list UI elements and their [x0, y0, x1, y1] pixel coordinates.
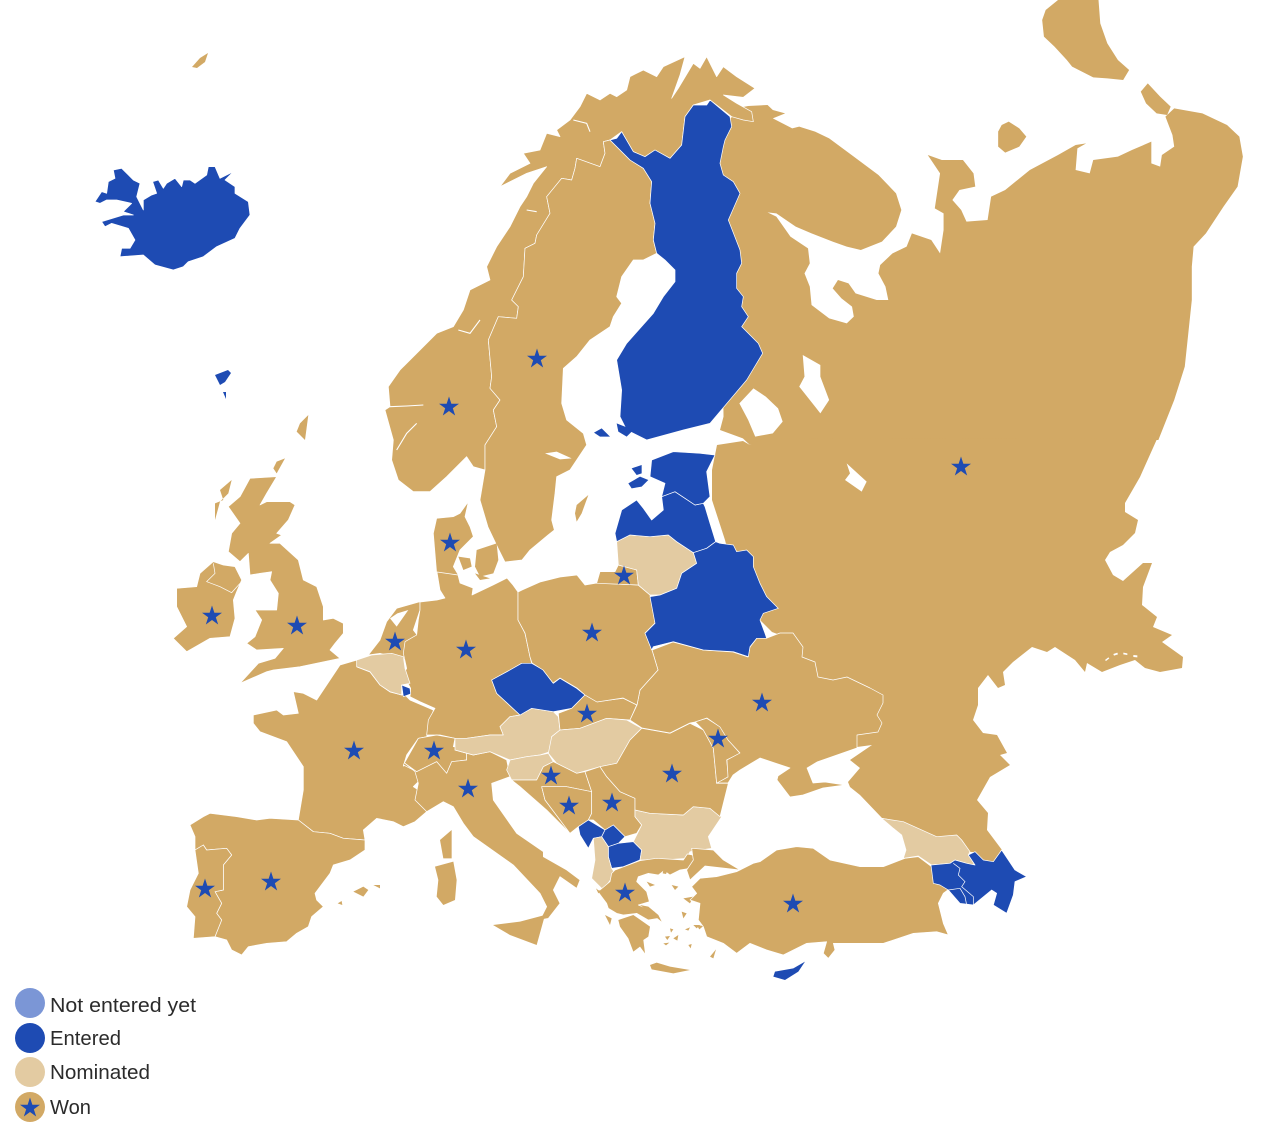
IJsselmeer — [390, 610, 408, 627]
Albania — [592, 837, 615, 890]
Balearic Islands — [338, 885, 380, 905]
Belarus — [645, 542, 778, 657]
Great Britain — [228, 477, 343, 683]
Hungary — [548, 718, 642, 773]
Kolguev island — [998, 122, 1026, 153]
star: Spain — [261, 872, 281, 890]
Romania — [600, 723, 728, 817]
France — [253, 660, 433, 840]
Luxembourg — [402, 685, 411, 697]
star: Switzerland — [424, 740, 444, 759]
white sea islands cut-outs and lakes — [739, 355, 1137, 661]
Russia — [712, 105, 1243, 862]
legend item: Entered — [15, 1023, 121, 1053]
Spain — [190, 813, 365, 955]
Estonia — [628, 452, 715, 505]
Germany — [403, 572, 532, 738]
star: Kaliningrad — [614, 566, 634, 584]
Ireland — [173, 562, 242, 652]
North Macedonia — [608, 842, 642, 868]
Greece — [596, 854, 716, 973]
star: Sweden — [527, 348, 547, 367]
legend item: Nominated — [15, 1057, 150, 1087]
Poland — [518, 575, 658, 705]
Bulgaria — [633, 807, 722, 860]
Sweden — [480, 140, 657, 562]
star: France — [344, 740, 364, 759]
Italy — [405, 750, 580, 920]
Novaya Zemlya — [1042, 0, 1129, 80]
Switzerland — [403, 735, 467, 773]
Norway — [385, 57, 755, 492]
star: Moldova — [708, 728, 728, 747]
Lake Vanern — [545, 452, 572, 459]
star: Germany — [456, 640, 476, 658]
Croatia — [512, 762, 592, 833]
star: Slovakia — [577, 704, 597, 722]
Iceland — [95, 167, 250, 270]
star: Denmark — [440, 532, 460, 551]
Belgium — [357, 653, 410, 695]
Turkey — [687, 847, 950, 958]
star: Greece — [615, 882, 635, 901]
Corsica — [440, 830, 452, 858]
Montenegro — [578, 820, 605, 848]
Netherlands — [368, 602, 420, 660]
Kaliningrad — [597, 565, 638, 585]
legend — [15, 988, 196, 1122]
Denmark — [433, 502, 498, 580]
Lithuania — [617, 535, 697, 595]
star: Romania — [662, 764, 682, 782]
Kosovo — [602, 825, 625, 847]
legend item: Not entered yet — [15, 988, 196, 1018]
Georgia — [882, 818, 975, 865]
Czech Republic — [492, 663, 585, 715]
legend item: Nominated: Nominated — [50, 1062, 150, 1084]
Austria — [455, 708, 560, 760]
Latvia — [615, 492, 716, 553]
star: Croatia — [541, 766, 561, 784]
legend item: Won — [15, 1092, 91, 1122]
star: Portugal — [195, 878, 215, 897]
star: Netherlands — [385, 632, 405, 650]
star: Turkey — [783, 894, 803, 912]
Bear Island — [192, 53, 208, 68]
Faroe Islands — [215, 370, 231, 399]
Scottish islands — [215, 415, 308, 520]
Portugal — [187, 845, 232, 938]
star: Bosnia and Herzegovina — [559, 796, 579, 814]
Serbia — [585, 767, 642, 837]
Moldova — [695, 718, 740, 783]
Azerbaijan and Armenia — [931, 850, 1027, 913]
Won stars — [195, 348, 971, 912]
star: Russia — [951, 456, 971, 475]
star: Ukraine — [752, 692, 772, 711]
Sicily — [493, 915, 545, 945]
Sardinia — [435, 862, 457, 905]
Bosnia and Herzegovina — [542, 787, 592, 833]
legend item: Not entered yet: Not entered yet — [50, 995, 196, 1017]
Cyprus — [773, 962, 805, 980]
legend item: Entered: Entered — [50, 1028, 121, 1050]
Ukraine — [630, 633, 883, 797]
star: United Kingdom — [287, 616, 307, 634]
Gotland — [575, 495, 588, 522]
Slovenia — [507, 753, 553, 780]
Vaygach island — [1141, 83, 1171, 115]
legend item: Won: Won — [50, 1097, 91, 1119]
Slovakia — [558, 695, 637, 730]
star: Norway — [439, 396, 459, 415]
star: Ireland — [202, 606, 222, 624]
star: Italy — [458, 778, 478, 797]
star: Poland — [582, 622, 602, 641]
Finland — [594, 100, 763, 440]
star: Serbia — [602, 792, 622, 811]
